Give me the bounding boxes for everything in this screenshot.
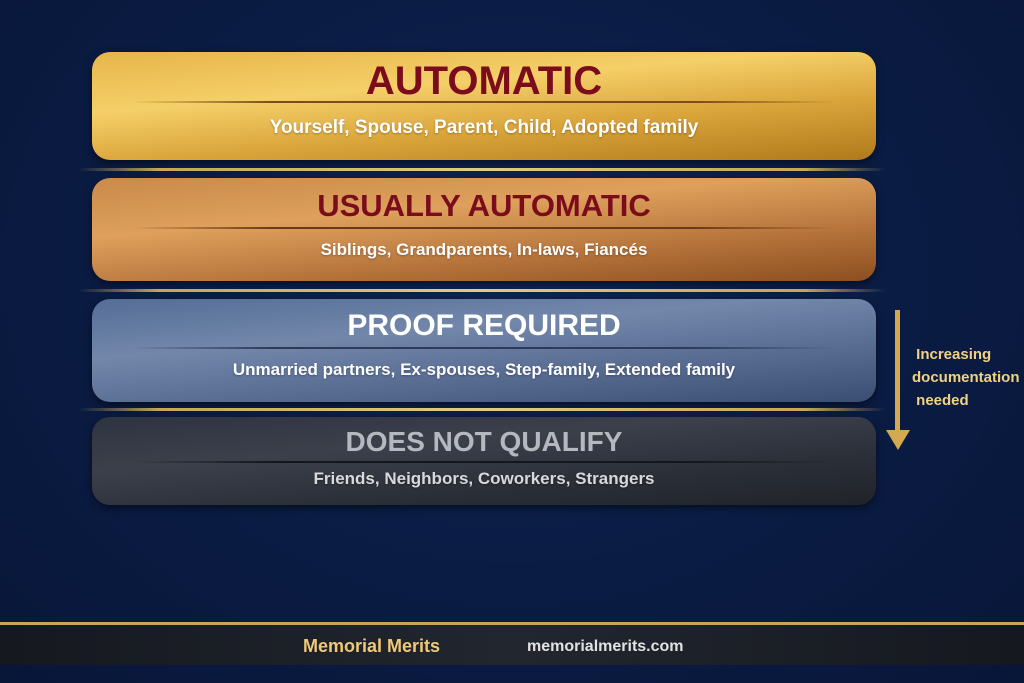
- text: automatic list: Yourself, Spouse, Parent, Child, Adopted family: [270, 117, 698, 138]
- text: usually list: Siblings, Grandparents, In-laws, Fiancés: [321, 240, 647, 259]
- footer brand: Memorial Merits: [303, 636, 440, 656]
- text: arrow label: [912, 346, 1020, 409]
- panel: automatic: [92, 52, 876, 160]
- heading: usually automatic: USUALLY AUTOMATIC: [317, 188, 651, 223]
- heading: does not qualify: DOES NOT QUALIFY: [346, 426, 622, 457]
- panel: does not qualify: [92, 417, 876, 505]
- panel: usually automatic: [92, 178, 876, 281]
- footer: [0, 622, 1024, 665]
- text: arrow label: Increasing: [916, 346, 991, 363]
- text: not qualify list: Friends, Neighbors, Coworkers, Strangers: [313, 469, 655, 488]
- text: arrow label: needed: [916, 392, 969, 409]
- heading: proof required: PROOF REQUIRED: [347, 309, 621, 342]
- text: arrow label: documentation: [912, 369, 1020, 386]
- arrow: increasing documentation: [886, 310, 910, 450]
- heading: automatic: AUTOMATIC: [366, 59, 602, 103]
- footer url: memorialmerits.com: [527, 638, 684, 655]
- text: proof list: Unmarried partners, Ex-spouses, Step-family, Extended family: [233, 360, 735, 379]
- panel: proof required: [92, 299, 876, 402]
